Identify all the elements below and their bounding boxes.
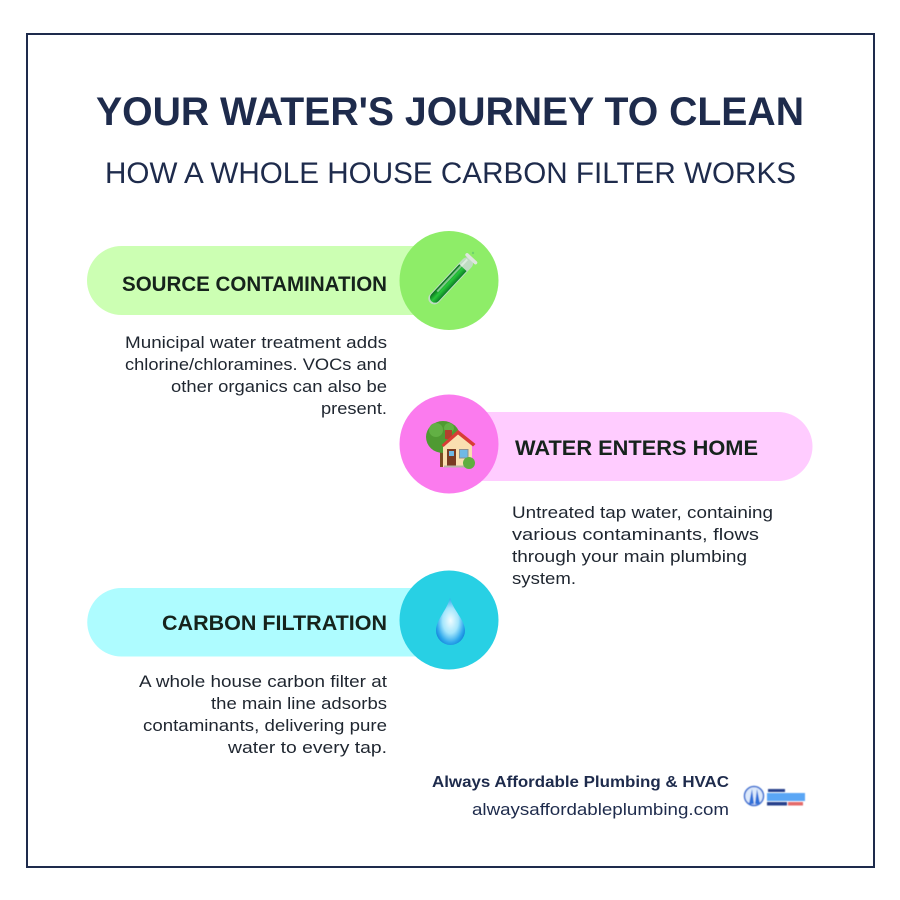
heading pill: source contamination: SOURCE CONTAMINATION — [122, 272, 387, 296]
body text: water enters home: through your main plumbing — [512, 548, 747, 566]
body text: source contamination: chlorine/chloramines. VOCs and — [125, 356, 387, 374]
panel: source contamination — [87, 231, 499, 418]
heading pill: water enters home — [470, 412, 813, 481]
panel: carbon filtration — [87, 570, 498, 757]
subtitle: HOW A WHOLE HOUSE CARBON FILTER WORKS — [105, 157, 796, 190]
body text: carbon filtration: A whole house carbon filter at — [139, 673, 387, 691]
heading pill: water enters home: WATER ENTERS HOME — [515, 436, 758, 460]
body text: source contamination: present. — [321, 400, 387, 418]
panel: water enters home — [400, 394, 813, 588]
icon: test tube — [400, 231, 498, 330]
body text: carbon filtration — [139, 673, 387, 757]
icon: company logo — [744, 786, 805, 806]
heading pill: carbon filtration: CARBON FILTRATION — [162, 611, 387, 635]
body text: water enters home: various contaminants, flows — [512, 526, 759, 544]
footer: company name and website: alwaysaffordableplumbing.com — [472, 800, 729, 819]
heading pill: carbon filtration — [87, 588, 430, 656]
body text: carbon filtration: contaminants, delivering pure — [143, 717, 387, 735]
body text: source contamination: other organics can also be — [171, 378, 387, 396]
footer: company name and website: Always Affordable Plumbing & HVAC — [432, 774, 729, 791]
body text: carbon filtration: the main line adsorbs — [211, 695, 387, 713]
icon: house with tree — [400, 394, 498, 494]
footer: company name and website — [432, 774, 729, 819]
body text: source contamination: Municipal water treatment adds — [125, 334, 387, 352]
body text: water enters home: Untreated tap water, containing — [512, 504, 773, 522]
icon: water drop — [400, 570, 498, 670]
body text: water enters home — [512, 504, 773, 588]
title: YOUR WATER'S JOURNEY TO CLEAN — [96, 90, 804, 134]
heading pill: source contamination — [87, 246, 430, 315]
body text: carbon filtration: water to every tap. — [227, 739, 387, 757]
body text: water enters home: system. — [512, 570, 576, 588]
body text: source contamination — [125, 334, 387, 418]
